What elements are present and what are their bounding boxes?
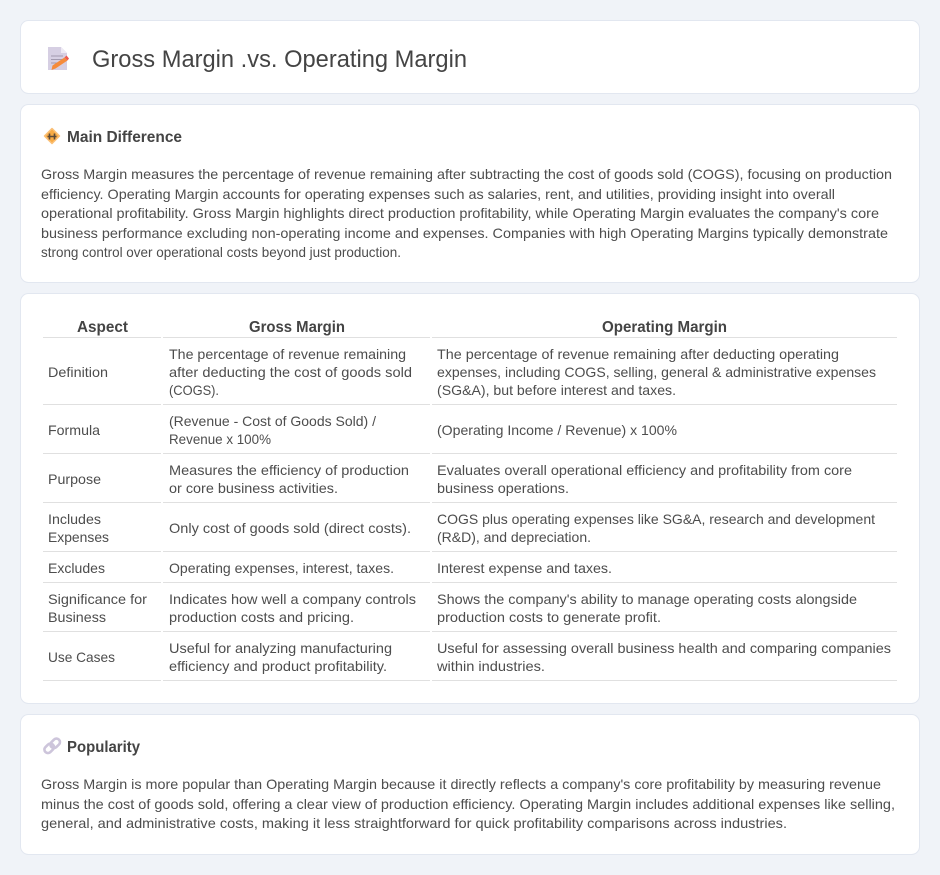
table row: significance for business: Shows the company's ability to manage operating costs alongside bbox=[437, 591, 857, 607]
table row: use cases bbox=[43, 640, 897, 681]
table row: excludes: Interest expense and taxes. bbox=[437, 560, 612, 576]
table header row: Gross Margin bbox=[249, 319, 345, 336]
table row: includes expenses: Only cost of goods sold (direct costs). bbox=[169, 520, 411, 536]
text block: main difference paragraph: Gross Margin measures the percentage of revenue remaining after subtracting the cost of goods sold (COGS), focusing on production bbox=[41, 166, 892, 182]
icon: document with pencil bbox=[48, 47, 69, 70]
text block: main difference paragraph: efficiency. Operating Margin accounts for operating expenses such as salaries, rent, and utilities, providing insight into overall bbox=[41, 186, 835, 202]
heading: main difference: Main Difference bbox=[67, 129, 182, 146]
table row: use cases: efficiency and product profitability. bbox=[169, 658, 387, 674]
table row: formula: Revenue x 100% bbox=[169, 431, 271, 447]
table row: definition: (SG&A), but before interest and taxes. bbox=[437, 382, 676, 398]
table row: excludes bbox=[43, 560, 897, 583]
text block: main difference paragraph bbox=[41, 166, 892, 260]
table row: formula bbox=[43, 413, 897, 454]
text block: main difference paragraph: operational profitability. Gross Margin highlights direct production profitability, while Operating Margin evaluates the company's core bbox=[41, 205, 879, 221]
table row: formula: (Operating Income / Revenue) x 100% bbox=[437, 422, 677, 438]
panel: comparison table bbox=[20, 294, 920, 704]
icon: warning diamond bbox=[44, 128, 60, 144]
text block: popularity paragraph bbox=[41, 776, 895, 831]
table row: significance for business: production costs and pricing. bbox=[169, 609, 354, 625]
table row: purpose: Purpose bbox=[48, 471, 101, 487]
table row: purpose: Measures the efficiency of production bbox=[169, 462, 409, 478]
panel: main difference bbox=[20, 104, 920, 282]
table row: purpose: Evaluates overall operational efficiency and profitability from core bbox=[437, 462, 852, 478]
text block: popularity paragraph: Gross Margin is more popular than Operating Margin because it directly reflects a company's core profitability by measuring revenue bbox=[41, 776, 881, 792]
table row: includes expenses bbox=[43, 511, 897, 552]
icon: chain link bbox=[43, 737, 61, 755]
table header row: Operating Margin bbox=[602, 319, 727, 336]
table row: purpose bbox=[43, 462, 897, 503]
table row: significance for business: Significance for bbox=[48, 591, 147, 607]
table row: excludes: Operating expenses, interest, taxes. bbox=[169, 560, 394, 576]
table header row: Aspect bbox=[77, 319, 129, 336]
table row: significance for business: Indicates how well a company controls bbox=[169, 591, 416, 607]
table row: use cases: within industries. bbox=[436, 658, 545, 674]
table row: significance for business: Business bbox=[48, 609, 106, 625]
table row: significance for business: production costs to generate profit. bbox=[437, 609, 661, 625]
table row: definition: after deducting the cost of goods sold bbox=[169, 364, 412, 380]
table row: includes expenses: COGS plus operating expenses like SG&A, research and development bbox=[437, 511, 875, 527]
text block: popularity paragraph: minus the cost of goods sold, offering a clear view of production efficiency. Operating Margin includes additional expenses like selling, bbox=[41, 796, 895, 812]
table row: purpose: business operations. bbox=[437, 480, 569, 496]
table row: excludes: Excludes bbox=[48, 560, 105, 576]
table row: use cases: Use Cases bbox=[48, 649, 115, 665]
table row: purpose: or core business activities. bbox=[169, 480, 338, 496]
table row: definition: expenses, including COGS, selling, general & administrative expenses bbox=[437, 364, 876, 380]
table header row bbox=[43, 319, 897, 338]
table row: includes expenses: (R&D), and depreciation. bbox=[437, 529, 591, 545]
table row: includes expenses: Includes bbox=[48, 511, 101, 527]
table row: includes expenses: Expenses bbox=[48, 529, 109, 545]
text block: main difference paragraph: business performance excluding non-operating income and expenses. Companies with high Operating Margins typically demonstrate bbox=[41, 225, 888, 241]
table row: definition: Definition bbox=[48, 364, 108, 380]
table row: definition bbox=[43, 346, 897, 405]
text block: main difference paragraph: strong control over operational costs beyond just production. bbox=[41, 244, 401, 260]
panel: page header bbox=[20, 20, 920, 94]
heading: popularity: Popularity bbox=[67, 739, 140, 756]
table row: definition: The percentage of revenue remaining bbox=[169, 346, 406, 362]
table row: definition: (COGS). bbox=[169, 382, 219, 398]
table row: use cases: Useful for assessing overall business health and comparing companies bbox=[437, 640, 891, 656]
table row: formula: Formula bbox=[48, 422, 100, 438]
table row: significance for business bbox=[43, 591, 897, 632]
panel: popularity bbox=[20, 714, 920, 854]
table row: definition: The percentage of revenue remaining after deducting operating bbox=[437, 346, 839, 362]
text block: popularity paragraph: general, and administrative costs, making it less straightforward for quick profitability comparisons across industries. bbox=[41, 815, 787, 831]
table row: use cases: Useful for analyzing manufacturing bbox=[169, 640, 392, 656]
table row: formula: (Revenue - Cost of Goods Sold) / bbox=[169, 413, 376, 429]
title: Gross Margin .vs. Operating Margin bbox=[92, 46, 467, 73]
